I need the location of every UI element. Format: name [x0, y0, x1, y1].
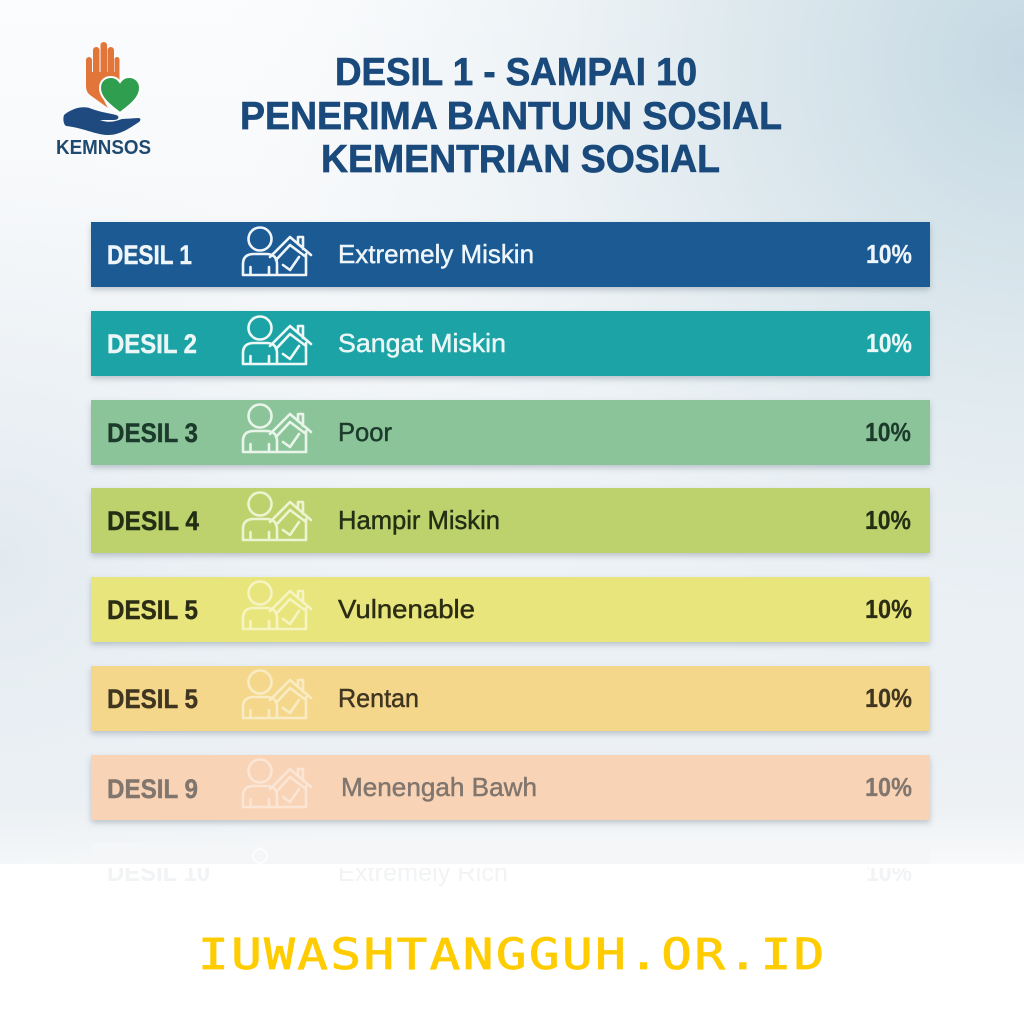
- panel: desil 9 row: [91, 755, 930, 820]
- panel: desil 3 row: 10%: [865, 417, 911, 447]
- logo: KEMNSOS: [56, 42, 151, 159]
- panel: second desil 5 row: 10%: [865, 683, 912, 713]
- panel: desil 4 row: Hampir Miskin: [338, 505, 500, 535]
- panel: desil 3 row: Poor: [338, 417, 392, 447]
- icon: green heart: [100, 77, 140, 113]
- panel: desil 1 row: Extremely Miskin: [338, 239, 534, 269]
- icon: person and house: [243, 316, 311, 364]
- panel: desil 1 row: 10%: [866, 239, 912, 269]
- panel: desil 2 row: Sangat Miskin: [338, 328, 506, 358]
- icon: person and house: [243, 760, 311, 807]
- panel: desil 5 row: DESIL 5: [107, 595, 198, 625]
- icon: person and house: [243, 404, 311, 452]
- panel: second desil 5 row: [91, 666, 930, 731]
- title: PENERIMA BANTUUN SOSIAL: [240, 95, 782, 138]
- icon: person and house: [243, 492, 311, 540]
- panel: faded desil 10 row: DESIL 10: [107, 859, 210, 887]
- icon: person and house: [243, 670, 311, 718]
- icon: raised orange hand: [86, 42, 120, 108]
- panel: desil 1 row: [91, 222, 930, 287]
- panel: desil 4 row: 10%: [865, 505, 911, 535]
- panel: desil 9 row: 10%: [865, 772, 912, 802]
- title: DESIL 1 - SAMPAI 10: [335, 51, 697, 94]
- panel: second desil 5 row: Rentan: [338, 683, 419, 713]
- panel: desil 3 row: DESIL 3: [107, 418, 198, 448]
- panel: faded desil 10 row: 10%: [866, 860, 912, 887]
- footer website text: IUWASHTANGGUH.OR.ID: [198, 930, 824, 980]
- panel: desil 5 row: 10%: [865, 594, 912, 624]
- panel: desil 4 row: DESIL 4: [107, 506, 199, 536]
- panel: desil 5 row: [91, 577, 930, 642]
- panel: desil 3 row: [91, 400, 930, 465]
- panel: desil 2 row: 10%: [866, 328, 912, 358]
- logo wordmark: KEMNSOS: [56, 137, 151, 159]
- icon: person and house: [243, 228, 311, 275]
- panel: desil 2 row: DESIL 2: [107, 329, 197, 359]
- panel: faded desil 10 row: Extremely Rich: [338, 859, 508, 887]
- title: KEMENTRIAN SOSIAL: [321, 138, 720, 181]
- panel: second desil 5 row: DESIL 5: [107, 684, 198, 714]
- panel: desil 5 row: Vulnenable: [338, 594, 475, 624]
- title: [240, 51, 782, 181]
- panel: desil 1 row: DESIL 1: [107, 240, 192, 270]
- panel: desil 9 row: DESIL 9: [107, 774, 198, 804]
- panel: desil 2 row: [91, 311, 930, 376]
- icon: blue open hand: [63, 107, 140, 135]
- panel: desil 9 row: Menengah Bawh: [341, 772, 537, 802]
- icon: person and house: [243, 582, 311, 629]
- panel: desil 4 row: [91, 488, 930, 553]
- panel: faded desil 10 row: [91, 843, 930, 887]
